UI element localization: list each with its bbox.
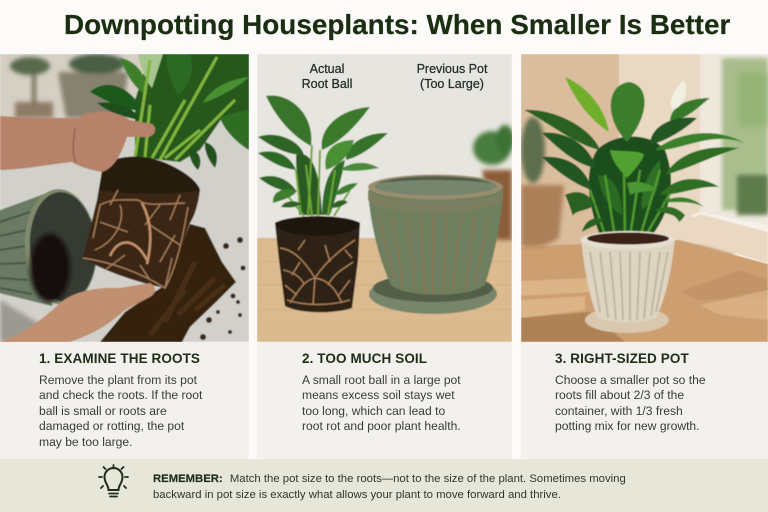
text column 2 background	[257, 342, 512, 459]
remember callout text	[153, 473, 626, 501]
step 1 text	[39, 373, 202, 449]
photo label: previous pot: (Too Large)	[420, 77, 484, 91]
step 3 heading: 3. RIGHT-SIZED POT	[555, 351, 689, 366]
icon: large green pot with saucer	[368, 174, 503, 314]
step 2 text: means excess soil stays wet	[302, 388, 455, 402]
step 3 text: potting mix for new growth.	[555, 419, 700, 433]
step 2 text	[302, 373, 461, 433]
icon: plant foliage	[90, 54, 249, 170]
text column 1 background	[0, 342, 249, 459]
photo label: previous pot	[417, 62, 488, 91]
panel: right-sized pot photo	[521, 54, 768, 342]
icon: root ball	[83, 157, 200, 288]
step 3 text: Choose a smaller pot so the	[555, 373, 706, 387]
icon: soil pile	[100, 224, 246, 342]
step 1 text: ball is small or roots are	[39, 404, 167, 418]
title: Downpotting Houseplants: When Smaller Is Better	[64, 9, 730, 40]
icon: cream ribbed pot with saucer	[581, 231, 675, 333]
icon: pot on its side	[0, 187, 101, 307]
photo label: previous pot: Previous Pot	[417, 62, 487, 76]
panel: too much soil photo	[257, 54, 514, 342]
icon: small plant	[258, 96, 388, 216]
wall, window and floor	[521, 54, 768, 342]
step 3 text: roots fill about 2/3 of the	[555, 388, 684, 402]
photo label: actual root ball: Root Ball	[302, 77, 352, 91]
photo panels	[0, 54, 768, 342]
remember callout text: REMEMBER: Match the pot size to the roots—not to the size of the plant. Sometimes moving	[153, 473, 626, 485]
step 3 text	[555, 373, 706, 433]
photo label: actual root ball: Actual	[310, 62, 344, 76]
step 3 text: container, with 1/3 fresh	[555, 404, 683, 418]
step 2 heading: 2. TOO MUCH SOIL	[302, 351, 427, 366]
text column 3 background	[521, 342, 768, 459]
icon: hands	[0, 111, 155, 342]
step 1 text: may be too large.	[39, 435, 132, 449]
step 2 text: A small root ball in a large pot	[302, 373, 461, 387]
remember callout text: backward in pot size is exactly what allows your plant to move forward and thrive.	[153, 489, 561, 501]
step 2 text: too long, which can lead to	[302, 404, 445, 418]
panel: examine roots photo	[0, 54, 249, 342]
step 1 text: Remove the plant from its pot	[39, 373, 197, 387]
wall and wooden table	[257, 54, 514, 342]
wall and marble table	[0, 54, 249, 342]
step 1 heading: 1. EXAMINE THE ROOTS	[39, 351, 200, 366]
step 2 text: root rot and poor plant health.	[302, 419, 461, 433]
callout band	[0, 459, 768, 512]
step 1 text: and check the roots. If the root	[39, 388, 202, 402]
photo label: actual root ball	[302, 62, 352, 91]
step 1 text: damaged or rotting, the pot	[39, 419, 184, 433]
icon: root ball	[275, 216, 360, 312]
icon: peace lily	[524, 77, 744, 237]
